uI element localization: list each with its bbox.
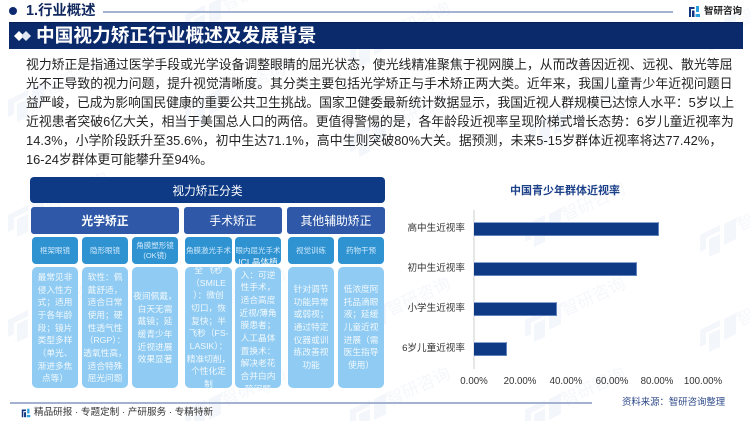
icon: brand mark [689, 6, 700, 17]
x axis labels [460, 376, 722, 387]
intro paragraph: 16-24岁群体更可能攀升至94%。 [26, 152, 213, 167]
detail: frame glasses: 于各年龄 [38, 310, 72, 320]
category: auxiliary [287, 207, 385, 234]
detail: laser surgery: LASIK）： [190, 341, 227, 351]
detail: OK lens: 效果显著 [138, 354, 172, 364]
classification heading [30, 177, 385, 203]
detail: drug intervention: 使用） [348, 360, 374, 370]
category: optical: 光学矫正 [81, 214, 129, 228]
detail: laser surgery: 制 [204, 379, 213, 389]
intro paragraph: 视力矫正是指通过医学手段或光学设备调整眼睛的屈光状态，使光线精准聚焦于视网膜上，从而改善因近视、远视、散光等屈 [26, 57, 732, 72]
intro paragraph: 近视患者突破6亿大关，相当于美国总人口的两倍。更值得警惕的是，各年龄段近视率呈现阶梯式增长态势：6岁儿童近视率为 [26, 114, 734, 129]
detail: frame glasses: 渐进多焦 [38, 361, 72, 371]
category: surgical [184, 207, 282, 234]
detail: contact lenses: 戴舒适， [88, 285, 122, 295]
detail: OK lens [132, 267, 178, 388]
detail: frame glasses: 最常见非 [38, 272, 72, 282]
type: vision training: 视觉训练 [296, 246, 326, 254]
detail: laser surgery: 切口，恢 [191, 303, 226, 313]
x axis labels: 40.00% [550, 376, 582, 387]
detail: laser surgery: （SMILE [191, 278, 226, 288]
section dot [9, 7, 17, 15]
icon: footer logo [22, 408, 30, 418]
detail: contact lenses [82, 267, 128, 388]
detail: contact lenses: 透氧性高， [83, 348, 127, 358]
section rule [103, 10, 673, 12]
intro paragraph: 14.3%，小学阶段跃升至35.6%，初中生达71.1%，高中生则突破80%大关。据预测，未来5-15岁群体近视率将达77.42%， [26, 133, 722, 148]
detail: ICL surgery: 置换术： [241, 346, 275, 356]
x axis labels: 80.00% [641, 376, 673, 387]
bar: high school [407, 222, 659, 236]
text: ICL晶体植 [238, 257, 278, 267]
bar: junior high: 初中生近视率 [407, 263, 465, 274]
x axis labels: 20.00% [504, 376, 536, 387]
footer rule [10, 402, 592, 404]
footer [22, 406, 213, 418]
text: 障问题 [245, 384, 271, 394]
type: OK lens [132, 237, 178, 264]
chart axis [473, 210, 474, 369]
detail: laser surgery: ）：微创 [193, 290, 224, 300]
section heading: 1.行业概述 [26, 3, 96, 19]
chart title: 中国青少年群体近视率 [510, 185, 620, 197]
type: ICL surgery [235, 237, 281, 264]
classification heading: 视力矫正分类 [172, 184, 243, 198]
intro paragraph: 光不正导致的视力问题，提升视觉清晰度。其分类主要包括光学矫正与手术矫正两大类。近年来，我国儿童青少年近视问题日 [26, 76, 732, 91]
detail: vision training: 功能异常 [294, 297, 328, 307]
detail: laser surgery: 个性化定 [191, 366, 226, 376]
title banner [9, 22, 743, 49]
category: optical [31, 207, 179, 234]
detail: laser surgery: 全 飞秒 [194, 265, 223, 275]
detail: laser surgery: 复快；半 [191, 316, 226, 326]
type: laser surgery [185, 237, 232, 264]
detail: frame glasses: 类型多样 [38, 335, 72, 345]
detail: drug intervention: 儿童近视 [344, 322, 378, 332]
detail: frame glasses: 点等） [42, 373, 68, 383]
detail: drug intervention: 液；延缓 [344, 309, 378, 319]
detail: laser surgery: 飞秒（FS- [188, 328, 229, 338]
detail: frame glasses [32, 267, 78, 388]
detail: vision training: 练改善视 [294, 347, 328, 357]
type: contact lenses: 隐形眼镜 [90, 246, 120, 254]
detail: ICL surgery: 近视/薄角 [239, 308, 277, 318]
bar: primary [407, 302, 557, 316]
detail: contact lenses: 屈光问题 [88, 373, 122, 383]
bar: age six [402, 342, 507, 356]
category: auxiliary: 其他辅助矫正 [301, 214, 371, 228]
detail: contact lenses: 适合日常 [88, 297, 122, 307]
detail: vision training: 或弱视； [294, 309, 328, 319]
detail: contact lenses: （RGP）： [85, 335, 125, 345]
detail: contact lenses: 软性：佩 [88, 272, 122, 282]
detail: drug intervention: 低浓度阿 [344, 284, 378, 294]
detail: frame glasses: 段；镜片 [38, 323, 72, 333]
type: OK lens: (OK镜) [143, 250, 167, 260]
detail: contact lenses: 性透气性 [88, 323, 122, 333]
detail: OK lens: 夜间佩戴， [133, 291, 177, 301]
detail: ICL surgery: 合并白内 [241, 371, 275, 381]
detail: contact lenses: 使用；硬 [88, 310, 122, 320]
detail: OK lens: 近视进展 [138, 342, 172, 352]
detail: vision training [288, 267, 334, 388]
type: ICL surgery: 眼内屈光手术 [236, 246, 280, 254]
type: frame glasses [32, 237, 78, 264]
detail: frame glasses: 侵入性方 [38, 285, 72, 295]
detail: OK lens: 戴镜；延 [138, 316, 172, 326]
section header [9, 2, 673, 19]
brand logo [689, 6, 742, 17]
bar: high school: 高中生近视率 [407, 223, 465, 234]
bar: age six: 6岁儿童近视率 [402, 343, 465, 354]
icon: diamonds [14, 31, 31, 41]
detail: contact lenses: 适合特殊 [88, 361, 122, 371]
detail: ICL surgery: 适合高度 [241, 295, 275, 305]
type: laser surgery: 角膜激光手术 [186, 246, 231, 254]
detail: vision training: 通过特定 [294, 322, 328, 332]
type: drug intervention: 药物干预 [346, 246, 376, 254]
detail: ICL surgery: 解决老花 [241, 358, 275, 368]
footer slogan: 精品研报 · 专题定制 · 产研服务 · 专精特新 [34, 407, 213, 418]
detail: vision training: 仪器或训 [294, 335, 328, 345]
brand name: 智研咨询 [704, 6, 742, 17]
detail: drug intervention: 进展（需 [344, 335, 378, 345]
x axis labels: 100.00% [684, 376, 722, 387]
bar: junior high [407, 262, 637, 276]
type: contact lenses [82, 237, 128, 264]
detail: laser surgery: 精准切削， [187, 354, 230, 364]
type: drug intervention [338, 237, 384, 264]
detail: frame glasses: （单光、 [38, 348, 72, 358]
x axis labels: 60.00% [596, 376, 628, 387]
type: frame glasses: 框架眼镜 [40, 246, 70, 254]
detail: ICL surgery: 入：可逆 [241, 270, 275, 280]
detail: vision training: 针对调节 [294, 284, 328, 294]
type: vision training [288, 237, 334, 264]
detail: ICL surgery [235, 267, 281, 388]
detail: frame glasses: 式；适用 [38, 297, 72, 307]
detail: ICL surgery: 膜患者； [241, 320, 275, 330]
detail: drug intervention: 托品滴眼 [344, 297, 378, 307]
detail: laser surgery [185, 267, 232, 388]
intro paragraph: 益严峻，已成为影响国民健康的重要公共卫生挑战。国家卫健委最新统计数据显示，我国近视人群规模已达惊人水平：5岁以上 [26, 95, 734, 110]
bar: primary: 小学生近视率 [407, 303, 465, 314]
detail: ICL surgery: 人工晶体 [241, 333, 275, 343]
intro paragraph [26, 57, 734, 167]
detail: ICL surgery: 性手术， [241, 282, 275, 292]
type: OK lens: 角膜塑形镜 [136, 240, 174, 250]
detail: vision training: 功能 [302, 360, 320, 370]
category: surgical: 手术矫正 [209, 214, 257, 228]
x axis labels: 0.00% [460, 376, 488, 387]
source note: 资料来源：智研咨询整理 [622, 396, 725, 407]
detail: drug intervention [338, 267, 384, 388]
panel: classification [30, 177, 385, 234]
detail: drug intervention: 医生指导 [344, 347, 378, 357]
detail: OK lens: 白天无需 [138, 304, 172, 314]
title: 中国视力矫正行业概述及发展背景 [36, 25, 316, 46]
detail: OK lens: 缓青少年 [138, 329, 172, 339]
